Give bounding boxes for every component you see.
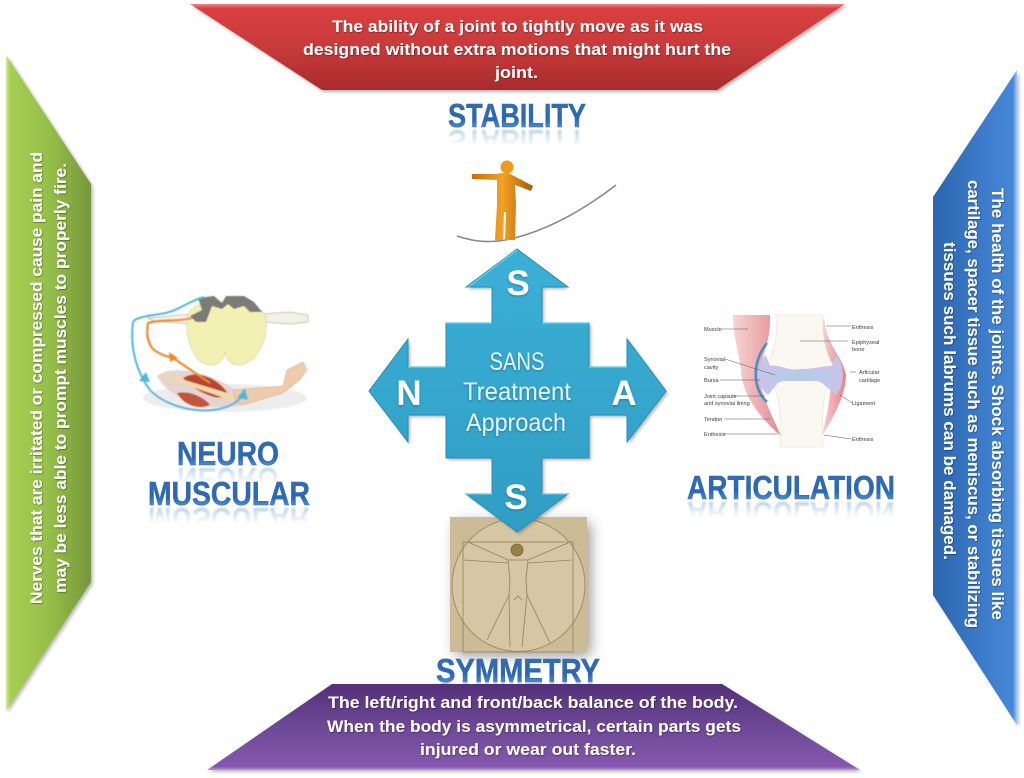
panel: stability definition xyxy=(190,4,847,92)
joint labels: Ligament xyxy=(852,401,875,407)
heading: stability: STABILITY xyxy=(448,97,586,134)
panel: stability definition: joint. xyxy=(494,63,538,82)
heading: articulation: ARTICULATION xyxy=(687,495,895,532)
heading: symmetry: SYMMETRY xyxy=(436,676,600,713)
letter: S top: S xyxy=(506,264,530,303)
joint labels: Joint capsule xyxy=(704,394,737,400)
panel: articulation definition: cartilage, spacer tissue such as meniscus, or stabilizing xyxy=(964,180,983,628)
letter: A: A xyxy=(611,374,637,413)
joint labels: cartilage xyxy=(859,378,880,384)
joint labels: Synovial xyxy=(704,357,725,363)
heading: symmetry: SYMMETRY xyxy=(436,652,600,689)
letter: S bottom: S xyxy=(504,478,528,517)
panel: articulation definition: tissues such labrums can be damaged. xyxy=(940,242,959,560)
joint labels: Muscle xyxy=(704,327,722,333)
panel: neuromuscular definition: may be less able to prompt muscles to properly fire. xyxy=(51,163,70,593)
panel: stability definition: The ability of a joint to tightly move as it was xyxy=(332,17,703,36)
panel: articulation definition xyxy=(933,70,1019,727)
heading: neuro muscular xyxy=(140,435,318,538)
letter: N: N xyxy=(396,374,422,413)
heading: articulation xyxy=(682,469,900,532)
diagram: SANS cross arrows xyxy=(369,249,668,534)
panel: neuromuscular definition: Nerves that are irritated or compressed cause pain and xyxy=(27,152,46,604)
heading: neuro muscular: MUSCULAR xyxy=(148,501,310,538)
joint labels: and synovial lining xyxy=(704,401,750,407)
heading: neuro muscular: NEURO xyxy=(177,435,279,472)
joint labels: bone xyxy=(852,347,864,353)
heading: stability xyxy=(440,97,595,160)
heading: articulation: ARTICULATION xyxy=(687,469,895,506)
icon: figure on tightrope xyxy=(457,160,616,242)
joint labels: Bursa xyxy=(704,378,720,384)
label: SANS Treatment Approach: Approach xyxy=(466,409,566,437)
panel: articulation definition: The health of the joints. Shock absorbing tissues like xyxy=(988,188,1007,620)
heading: neuro muscular: MUSCULAR xyxy=(148,475,310,512)
panel: symmetry definition: injured or wear out faster. xyxy=(420,740,636,759)
panel: symmetry definition xyxy=(207,684,862,772)
panel: neuromuscular definition xyxy=(6,55,93,713)
joint labels: cavity xyxy=(704,365,719,371)
label: SANS Treatment Approach: SANS xyxy=(490,348,544,376)
joint labels: Enthesis xyxy=(704,432,726,438)
joint labels: Articular xyxy=(859,370,880,376)
joint labels: Tendon xyxy=(704,417,722,423)
label: SANS Treatment Approach xyxy=(463,348,571,437)
label: SANS Treatment Approach: Treatment xyxy=(463,378,571,406)
joint labels: Enthesis xyxy=(852,325,874,331)
panel: symmetry definition: The left/right and front/back balance of the body. xyxy=(328,693,738,712)
panel: symmetry definition: When the body is asymmetrical, certain parts gets xyxy=(327,717,741,736)
joint labels: Epiphyseal xyxy=(852,340,879,346)
joint labels: Enthesis xyxy=(852,437,874,443)
heading: neuro muscular: NEURO xyxy=(177,461,279,498)
image: Vitruvian man xyxy=(450,517,590,655)
joint labels xyxy=(704,325,880,443)
panel: stability definition: designed without extra motions that might hurt the xyxy=(303,40,731,59)
image: joint anatomy diagram xyxy=(704,315,880,447)
image: neuromuscular spinal cord and arm xyxy=(132,296,308,412)
heading: stability: STABILITY xyxy=(448,123,586,160)
heading: symmetry xyxy=(436,652,600,713)
